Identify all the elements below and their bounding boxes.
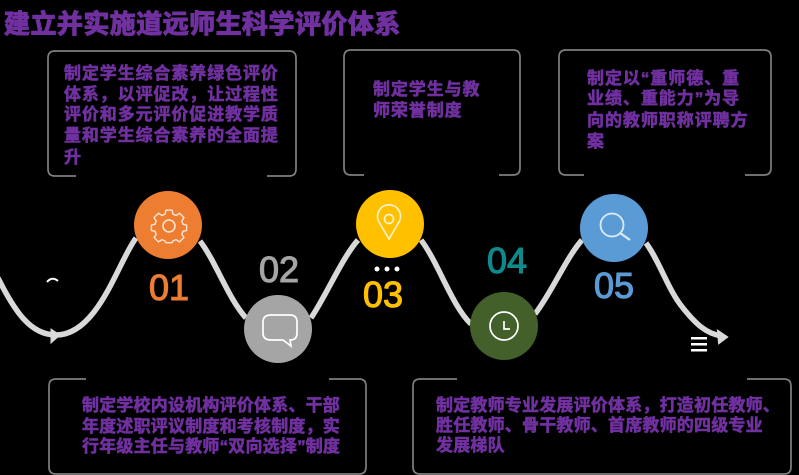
step 3 circle with location pin icon xyxy=(356,190,424,258)
title: 建立并实施道远师生科学评价体系 xyxy=(4,9,401,39)
panel: honor system: 制定学生与教 xyxy=(373,79,480,99)
panel: professional title evaluation: 案 xyxy=(587,131,605,151)
panel: internal institutions evaluation: 制定学校内设机构评价体系、干部 xyxy=(82,395,340,415)
panel: student evaluation system xyxy=(48,51,296,176)
step 4 circle with clock icon xyxy=(470,292,538,360)
panel: teacher development ladder: 胜任教师、骨干教师、首席教师的四级专业 xyxy=(436,415,763,435)
step 1 circle with gear icon xyxy=(134,191,202,259)
step 2 circle with speech bubble icon xyxy=(244,295,312,363)
step 3 number: 03 xyxy=(363,274,403,315)
panel: honor system: 师荣誉制度 xyxy=(373,101,462,120)
panel: professional title evaluation: 制定以“重师德、重 xyxy=(587,68,740,88)
step 5 number: 05 xyxy=(594,265,634,306)
panel: student evaluation system: 评价和多元评价促进教学质 xyxy=(64,104,279,124)
small white arc mark xyxy=(47,279,58,282)
panel: professional title evaluation: 业绩、重能力”为导 xyxy=(587,89,740,108)
panel: student evaluation system: 升 xyxy=(64,148,82,167)
panel: honor system xyxy=(344,50,520,175)
step 4 number: 04 xyxy=(487,240,527,281)
panel: student evaluation system: 量和学生综合素养的全面提 xyxy=(64,125,279,145)
step 2 number: 02 xyxy=(259,249,299,290)
wave line with arrows xyxy=(0,238,727,343)
panel: student evaluation system: 制定学生综合素养绿色评价 xyxy=(64,63,279,83)
panel: student evaluation system: 体系，以评促改，让过程性 xyxy=(64,84,279,104)
panel: internal institutions evaluation xyxy=(49,379,366,474)
panel: internal institutions evaluation: 行年级主任与教师“双向选择”制度 xyxy=(82,436,340,456)
panel: professional title evaluation: 向的教师职称评聘方 xyxy=(587,110,749,130)
panel: teacher development ladder: 发展梯队 xyxy=(436,435,505,455)
panel: professional title evaluation xyxy=(559,50,771,175)
step 1 number: 01 xyxy=(149,267,189,308)
panel: teacher development ladder xyxy=(413,379,791,474)
small white list mark xyxy=(691,337,707,352)
panel: teacher development ladder: 制定教师专业发展评价体系，打造初任教师、 xyxy=(436,395,780,415)
decorative dots xyxy=(374,266,400,272)
step 5 circle with magnifier icon xyxy=(580,194,648,262)
panel: internal institutions evaluation: 年度述职评议制度和考核制度，实 xyxy=(82,416,340,436)
